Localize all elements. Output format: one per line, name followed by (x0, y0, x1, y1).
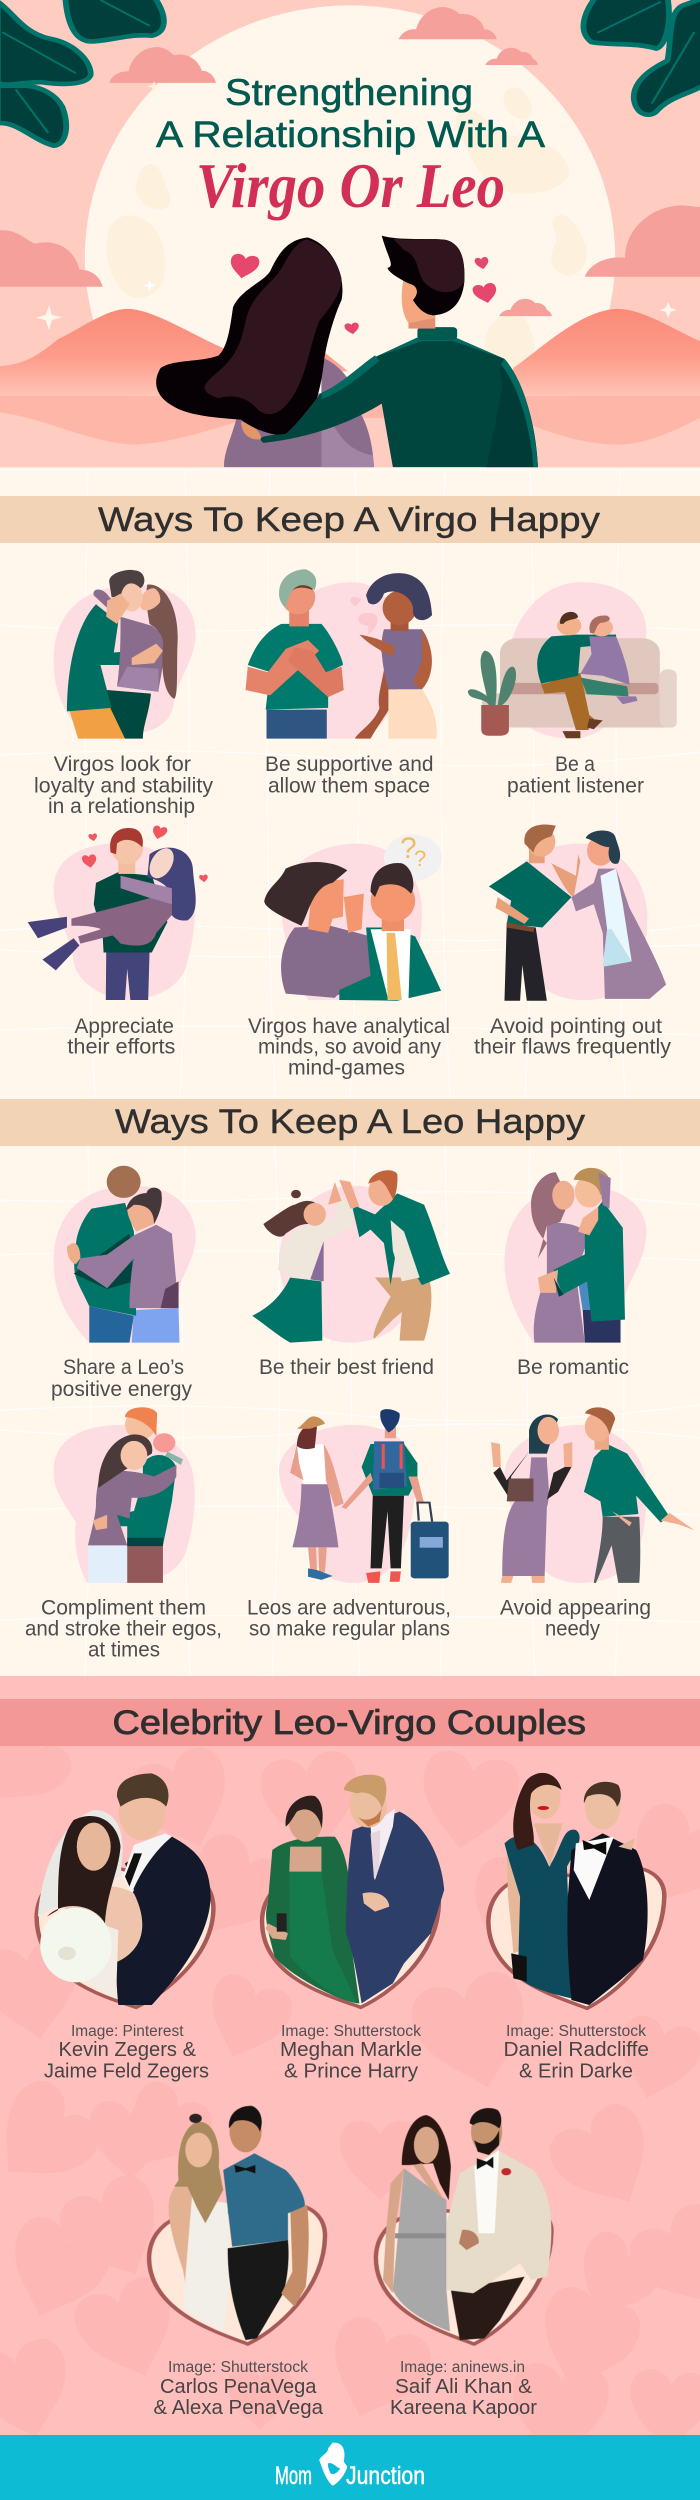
caption: Carlos and Alexa (154, 2359, 324, 2419)
illustration: holding hands travel (279, 1409, 449, 1583)
caption: loyalty (34, 753, 213, 818)
heading: celebrity: Celebrity Leo-Virgo Couples (112, 1704, 586, 1742)
caption: best friend: Be their best friend (259, 1356, 434, 1379)
caption: listener (507, 753, 644, 798)
panel: Leo illustrations (54, 1166, 694, 1583)
panel: celebrity background (0, 1676, 700, 2464)
caption: Carlos and Alexa: Carlos PenaVega (160, 2376, 317, 2398)
heading: celebrity (0, 1699, 700, 1746)
caption: supportive: Be supportive and (265, 753, 434, 776)
heading: Virgo (0, 496, 700, 543)
caption: listener: patient listener (507, 774, 644, 798)
caption: positive energy: positive energy (51, 1378, 192, 1401)
caption: analytical: Virgos have analytical (248, 1015, 450, 1038)
leaves (0, 0, 700, 146)
man from behind (261, 236, 538, 467)
caption: Kevin and Jaime: Image: Pinterest (71, 2023, 184, 2040)
caption: needy: needy (545, 1617, 600, 1640)
caption: compliment: Compliment them (41, 1596, 206, 1619)
panel: celebrity couples row 2 (149, 2106, 551, 2344)
caption: compliment (25, 1596, 222, 1661)
mountains (0, 309, 348, 396)
photo: Saif Ali Khan and Kareena Kapoor (376, 2108, 551, 2344)
title (156, 72, 545, 221)
hearts (227, 253, 500, 335)
illustration: couple kissing (54, 570, 196, 739)
heading: Virgo: Ways To Keep A Virgo Happy (98, 501, 600, 539)
illustration: patient listener on sofa (468, 582, 677, 739)
caption: Daniel and Erin: & Erin Darke (519, 2060, 633, 2082)
caption: appreciate: their efforts (67, 1036, 175, 1059)
footer: MomJunction (0, 2435, 700, 2500)
caption: flaws: their flaws frequently (474, 1036, 672, 1059)
panel: Virgo illustrations (28, 569, 677, 1001)
heading: Leo: Ways To Keep A Leo Happy (115, 1103, 585, 1141)
caption: needy (500, 1596, 651, 1640)
caption: flaws: Avoid pointing out (490, 1015, 662, 1038)
photo: Meghan Markle and Prince Harry (262, 1775, 444, 2007)
caption: romantic: Be romantic (517, 1356, 629, 1379)
caption: adventurous (247, 1596, 451, 1640)
photo: Carlos and Alexa PenaVega (149, 2106, 325, 2344)
caption: Carlos and Alexa: & Alexa PenaVega (154, 2397, 324, 2419)
illustration: supportive couple (246, 569, 437, 739)
icon: mother and baby logo (319, 2443, 347, 2486)
caption: loyalty: loyalty and stability (34, 774, 213, 798)
caption: Saif and Kareena: Image: aninews.in (400, 2359, 525, 2376)
panel: celebrity couples row 1 (37, 1773, 664, 2008)
caption: appreciate (67, 1015, 175, 1059)
caption: analytical: minds, so avoid any (258, 1036, 441, 1059)
caption: supportive (265, 753, 434, 798)
caption: flaws (474, 1015, 672, 1059)
caption: appreciate: Appreciate (74, 1015, 174, 1038)
caption: Meghan and Harry: & Prince Harry (284, 2060, 418, 2082)
illustration: needy couple (491, 1407, 694, 1583)
caption: needy: Avoid appearing (500, 1596, 651, 1619)
title: Virgo Or Leo (196, 150, 505, 221)
illustration: high five (252, 1170, 450, 1343)
captions: Virgo (34, 753, 672, 1080)
caption: Carlos and Alexa: Image: Shutterstock (168, 2359, 308, 2376)
photo: Daniel Radcliffe and Erin Darke (488, 1773, 664, 2008)
caption: analytical (248, 1015, 450, 1080)
illustration: bouquet hug (54, 1407, 195, 1583)
water (0, 396, 700, 467)
caption: supportive: allow them space (268, 774, 430, 798)
caption: positive energy: Share a Leo’s (63, 1356, 184, 1379)
caption: adventurous: Leos are adventurous, (247, 1596, 451, 1619)
caption: compliment: at times (88, 1638, 160, 1661)
clouds (0, 7, 700, 316)
heading: Leo (0, 1099, 700, 1146)
illustration: whispering couple (264, 835, 442, 1001)
page background lines (0, 470, 700, 1676)
caption: adventurous: so make regular plans (249, 1617, 450, 1640)
icon: question marks: ? (414, 846, 426, 871)
icon: question marks (400, 832, 426, 871)
caption: Saif and Kareena: Kareena Kapoor (390, 2397, 537, 2419)
caption: positive energy (51, 1356, 192, 1401)
caption: Saif and Kareena: Saif Ali Khan & (395, 2376, 533, 2398)
logo text: Junction (346, 2462, 425, 2490)
caption: compliment: and stroke their egos, (25, 1617, 222, 1640)
title: A Relationship With A (156, 114, 545, 155)
woman from behind (156, 237, 374, 467)
caption: Daniel and Erin: Image: Shutterstock (506, 2023, 646, 2040)
caption: Saif and Kareena (390, 2359, 537, 2419)
photo: Kevin Zegers and Jaime Feld Zegers (37, 1773, 213, 2007)
title: Strengthening (225, 72, 473, 113)
illustration: man carrying woman (28, 825, 209, 1000)
caption: Kevin and Jaime: Jaime Feld Zegers (44, 2060, 209, 2082)
hero illustration (0, 0, 700, 509)
logo text: Mom (275, 2462, 312, 2490)
stars (36, 81, 677, 330)
moon (85, 5, 615, 509)
caption: Kevin and Jaime: Kevin Zegers & (58, 2039, 197, 2061)
caption: Meghan and Harry: Image: Shutterstock (281, 2023, 421, 2040)
captions: celebrity row 2 (154, 2359, 537, 2419)
icon: question marks: ? (400, 832, 417, 865)
caption: listener: Be a (555, 753, 595, 776)
caption: Meghan and Harry (280, 2023, 422, 2082)
illustration: hugging couple (54, 1166, 196, 1343)
caption: analytical: mind-games (288, 1057, 405, 1080)
moon craters (106, 88, 587, 371)
logo text (275, 2462, 425, 2490)
caption: loyalty: Virgos look for (54, 753, 191, 776)
illustration: romantic couple (504, 1168, 646, 1343)
caption: Kevin and Jaime (44, 2023, 209, 2082)
caption: Meghan and Harry: Meghan Markle (280, 2039, 422, 2061)
caption: Daniel and Erin (504, 2023, 649, 2082)
caption: Daniel and Erin: Daniel Radcliffe (504, 2039, 649, 2061)
caption: loyalty: in a relationship (48, 795, 195, 818)
captions: celebrity row 1 (44, 2023, 649, 2082)
captions: Leo (25, 1356, 651, 1661)
illustration: pointing out flaws (489, 824, 666, 1001)
